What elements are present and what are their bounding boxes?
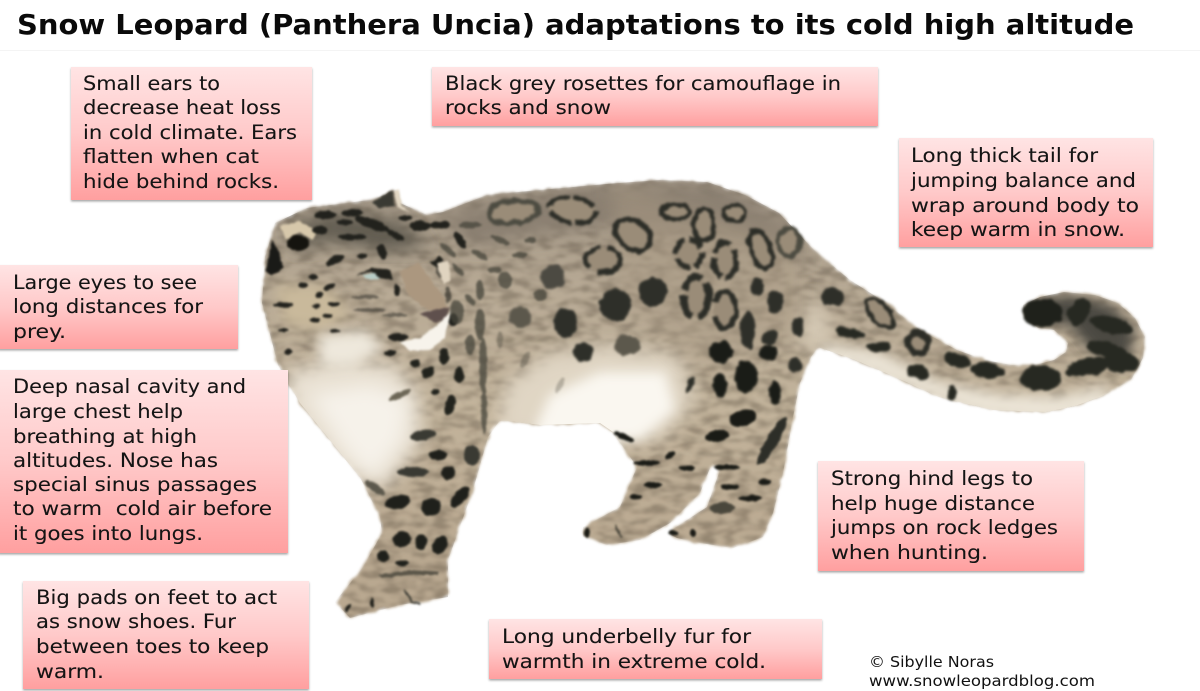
title: Snow Leopard (Panthera Uncia) adaptations to its cold high altitude	[17, 9, 1134, 41]
callout: deep nasal cavity: large chest help	[13, 400, 183, 423]
tail markings	[833, 295, 1140, 400]
callout: rosettes camouflage	[432, 67, 878, 126]
callout: deep nasal cavity: altitudes. Nose has	[13, 449, 218, 472]
illustration: snow leopard	[255, 180, 1155, 620]
callout: strong hind legs: jumps on rock ledges	[830, 516, 1058, 539]
callout: large eyes	[0, 265, 238, 349]
fur texture	[255, 180, 1155, 620]
callout: small ears: flatten when cat	[83, 145, 259, 168]
callout: big pads: as snow shoes. Fur	[36, 610, 237, 633]
leopard body silhouette	[262, 180, 1145, 618]
callout: strong hind legs	[818, 461, 1084, 571]
callout: big pads: warm.	[36, 660, 104, 683]
photo credit: www.snowleopardblog.com	[869, 672, 1095, 690]
callout: large eyes: long distances for	[13, 295, 204, 318]
callout: big pads	[23, 581, 309, 689]
callout: deep nasal cavity	[0, 370, 288, 553]
callout: small ears: decrease heat loss	[83, 96, 281, 119]
callout: long underbelly fur: Long underbelly fur for	[502, 625, 752, 648]
callout: rosettes camouflage: rocks and snow	[445, 96, 611, 119]
callout: small ears: in cold climate. Ears	[83, 121, 297, 144]
callout: long thick tail	[899, 138, 1153, 247]
callout: deep nasal cavity: to warm cold air before	[13, 497, 272, 520]
hind leg spots	[584, 407, 791, 538]
callout: small ears	[71, 67, 312, 200]
callout: rosettes camouflage: Black grey rosettes for camouflage in	[445, 72, 841, 95]
callout: strong hind legs: when hunting.	[831, 541, 988, 564]
callout: long thick tail: wrap around body to	[911, 194, 1139, 217]
callout: big pads: Big pads on feet to act	[36, 586, 277, 609]
callout: strong hind legs: Strong hind legs to	[831, 467, 1033, 490]
callout: deep nasal cavity: special sinus passages	[13, 473, 257, 496]
chest spots	[387, 348, 464, 417]
callout: deep nasal cavity: it goes into lungs.	[13, 522, 203, 545]
photo credit	[869, 653, 1095, 690]
callout: long underbelly fur: warmth in extreme cold.	[502, 650, 766, 673]
back rosettes	[487, 193, 928, 353]
callout: big pads: between toes to keep	[36, 635, 269, 658]
callout: long thick tail: keep warm in snow.	[911, 218, 1125, 241]
callout: long underbelly fur	[489, 619, 822, 679]
callout: long thick tail: Long thick tail for	[911, 144, 1099, 167]
cream belly, chest and tail shading	[275, 180, 1135, 490]
photo credit: © Sibylle Noras	[869, 653, 994, 671]
callout: deep nasal cavity: Deep nasal cavity and	[13, 375, 246, 398]
callout: deep nasal cavity: breathing at high	[13, 425, 197, 448]
head and face markings	[265, 190, 468, 356]
callout: long thick tail: jumping balance and	[910, 169, 1136, 192]
callout: strong hind legs: help huge distance	[831, 492, 1035, 515]
callout: large eyes: prey.	[13, 320, 66, 343]
torso solid spots	[509, 265, 844, 405]
callout: small ears: hide behind rocks.	[83, 170, 279, 193]
callout: small ears: Small ears to	[83, 72, 220, 95]
callout: large eyes: Large eyes to see	[13, 271, 197, 294]
front leg spots	[344, 428, 480, 613]
shoulder and neck mottles	[438, 222, 567, 434]
